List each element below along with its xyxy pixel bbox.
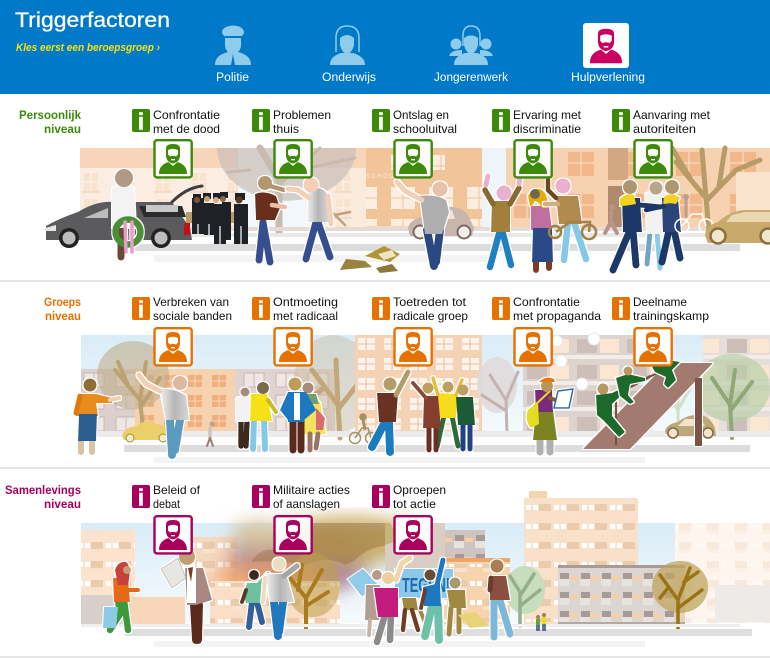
level label: samenlevings: [5, 483, 81, 511]
figures: police officers with civilian: [613, 180, 681, 270]
item: confrontatie met de dood: Confrontatie: [153, 108, 220, 122]
item: beleid of debat: i: [138, 484, 144, 510]
item: ontslag en schooluitval: [372, 108, 457, 177]
item: ontslag en schooluitval: Ontslag en: [393, 108, 449, 122]
item: aanvaring met autoriteiten: [612, 108, 711, 177]
figure: man waving in grey shirt: [397, 182, 449, 266]
climbing wall: [583, 363, 713, 449]
banner: TEGEN: TEGEN!: [402, 575, 450, 597]
title: Triggerfactoren: [15, 9, 170, 32]
item: ervaring met discriminatie: Ervaring met: [513, 108, 582, 122]
figures: background protesters: [402, 578, 466, 634]
instruction: Kles eerst een beroepsgroep ›: [16, 42, 160, 54]
figure: man with wreath: [112, 169, 140, 257]
item: confrontatie met de dood: i: [138, 108, 144, 134]
tab: Politie: Politie: [216, 72, 249, 84]
bicycle and background walker: [675, 214, 713, 233]
street scene: groeps: [81, 335, 770, 463]
item: aanvaring met autoriteiten: i: [618, 108, 624, 134]
item: confrontatie met de dood: met de dood: [153, 122, 220, 136]
tiny figures: [536, 613, 546, 631]
item: beleid of debat: [132, 483, 201, 553]
item: toetreden tot radicale groep: i: [378, 296, 384, 322]
item: militaire acties of aanslagen: i: [258, 484, 264, 510]
figure: woman in orange: [76, 378, 119, 452]
item: problemen thuis: Problemen: [273, 108, 331, 122]
figures: couple: [280, 378, 326, 450]
small car: [408, 207, 474, 238]
item: ontmoeting met radicaal: Ontmoeting: [273, 295, 338, 309]
tab: Hulpverlening, selected: Hulpverlening: [571, 72, 645, 84]
figure: running man: [372, 372, 408, 452]
item: verbreken van sociale banden: [132, 295, 232, 365]
item: deelname trainingskamp: trainingskamp: [633, 309, 709, 323]
level label: groeps: Groeps: [44, 295, 81, 309]
level label: groeps: niveau: [45, 309, 81, 323]
item: militaire acties of aanslagen: Militaire acties: [273, 483, 350, 497]
figure: protester with raised arms: [485, 176, 520, 267]
figure: man in brown shirt: [255, 176, 285, 262]
item: ontslag en schooluitval: schooluitval: [393, 122, 457, 136]
item: oproepen tot actie: tot actie: [393, 497, 436, 511]
item: toetreden tot radicale groep: radicale groep: [393, 309, 468, 323]
tab: Politie: [215, 26, 251, 84]
item: confrontatie met propaganda: met propaganda: [513, 309, 601, 323]
figures: group: [413, 378, 475, 450]
figure: man in grey: [263, 558, 297, 636]
item: confrontatie met propaganda: Confrontatie: [513, 295, 580, 309]
item: deelname trainingskamp: [612, 295, 709, 365]
tab: Onderwijs: Onderwijs: [322, 72, 376, 84]
item: toetreden tot radicale groep: [372, 295, 468, 365]
figure: protester in pink: [374, 558, 410, 642]
tab: Hulpverlening, selected: [571, 23, 645, 84]
car with open boot: [45, 186, 202, 248]
figure: man on the phone: [490, 560, 510, 637]
motorbike: [549, 222, 596, 239]
item: ontmoeting met radicaal: [252, 295, 338, 365]
figure: man waving: [139, 375, 189, 455]
panel: samenlevings niveau: [5, 483, 770, 647]
small walker: [207, 422, 214, 446]
figures: pallbearers with coffin: [186, 192, 248, 244]
yellow car in background: [458, 612, 490, 628]
item: problemen thuis: [252, 108, 331, 177]
tab: Jongerenwerk: [434, 26, 508, 84]
debris on the street: [340, 246, 400, 273]
item: ontmoeting met radicaal: met radicaal: [273, 309, 338, 323]
figure: woman with tablet: [527, 378, 573, 452]
street scene: persoonlijk: SCHOOL: [366, 174, 400, 180]
climbers on ropes: [596, 360, 680, 444]
figure: protester in blue: [421, 560, 443, 640]
figure: man reading newspaper: [161, 549, 212, 640]
tan car behind wall: [665, 415, 716, 438]
item: problemen thuis: thuis: [273, 122, 299, 136]
cyclist: [350, 414, 376, 444]
header bar: [0, 0, 770, 94]
item: verbreken van sociale banden: sociale banden: [153, 309, 232, 323]
item: deelname trainingskamp: i: [618, 296, 624, 322]
protest sign: [347, 568, 379, 597]
figure: woman in hijab: [103, 562, 138, 630]
figure: man in grey shirt: [288, 178, 331, 259]
item: confrontatie met de dood: [132, 108, 220, 177]
tan car: [705, 210, 770, 244]
panel: persoonlijk niveau: [19, 108, 770, 273]
item: toetreden tot radicale groep: Toetreden tot: [393, 295, 467, 309]
item: ervaring met discriminatie: discriminatie: [513, 122, 581, 136]
item: deelname trainingskamp: Deelname: [633, 295, 687, 309]
panel: groeps niveau: [44, 295, 770, 463]
figure: woman with headscarf: [528, 189, 553, 270]
item: ervaring met discriminatie: [492, 108, 582, 177]
item: oproepen tot actie: i: [378, 484, 384, 510]
item: beleid of debat: debat: [153, 497, 181, 511]
level label: samenlevings: Samenlevings: [5, 483, 81, 497]
item: problemen thuis: i: [258, 108, 264, 134]
street scene: samenleving: [81, 491, 770, 647]
item: verbreken van sociale banden: i: [138, 296, 144, 322]
item: ontmoeting met radicaal: i: [258, 296, 264, 322]
level label: samenlevings: niveau: [44, 497, 81, 511]
tab: Jongerenwerk: Jongerenwerk: [434, 72, 508, 84]
yellow car: [122, 421, 167, 442]
tab: Onderwijs: [322, 26, 376, 84]
item: ervaring met discriminatie: i: [498, 108, 504, 134]
item: beleid of debat: Beleid of: [153, 483, 201, 497]
item: militaire acties of aanslagen: [252, 483, 350, 553]
figure: child: [242, 570, 268, 627]
item: verbreken van sociale banden: Verbreken van: [153, 295, 229, 309]
item: ontslag en schooluitval: i: [378, 108, 384, 134]
item: confrontatie met propaganda: i: [498, 296, 504, 322]
level label: groeps: [44, 295, 81, 323]
level label: persoonlijk: [19, 108, 81, 136]
figure: man in tan jacket: [545, 178, 586, 260]
figure: man in taupe: [365, 570, 382, 635]
banner: TEGEN: [395, 569, 453, 598]
level label: persoonlijk: Persoonlijk: [19, 108, 81, 122]
item: aanvaring met autoriteiten: Aanvaring met: [633, 108, 711, 122]
figure: person in yellow: [250, 382, 276, 449]
item: aanvaring met autoriteiten: autoriteiten: [633, 122, 696, 136]
street scene: persoonlijk: [80, 148, 770, 262]
level label: persoonlijk: niveau: [44, 122, 81, 136]
small figures in background: [605, 194, 689, 233]
item: oproepen tot actie: Oproepen: [393, 483, 446, 497]
figure: man in white shirt: [236, 388, 250, 446]
item: confrontatie met propaganda: [492, 295, 601, 365]
item: militaire acties of aanslagen: of aanslagen: [273, 497, 340, 511]
thought bubbles: [552, 333, 600, 390]
tree: [672, 148, 760, 232]
item: oproepen tot actie: [372, 483, 446, 553]
